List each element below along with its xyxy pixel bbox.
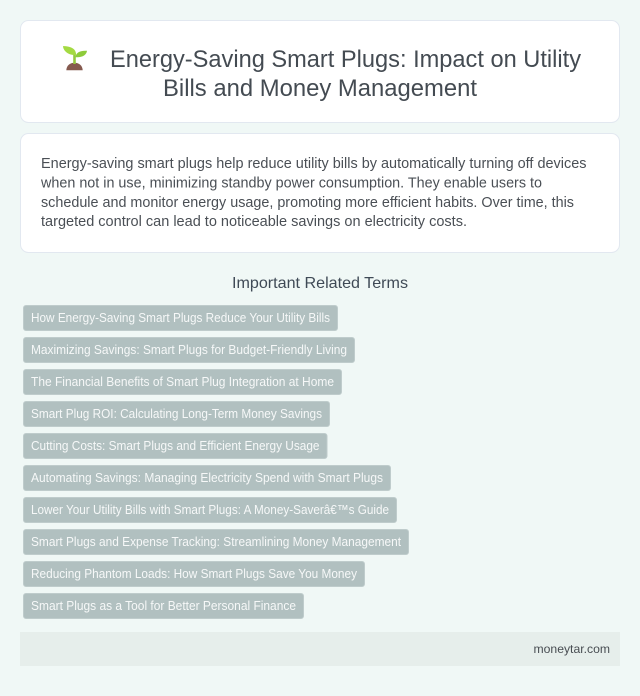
panel: summary card bbox=[20, 134, 620, 252]
title: Energy-Saving Smart Plugs: Impact on Utility bbox=[110, 46, 581, 73]
icon: sprout bbox=[63, 46, 87, 70]
tag 3: The Financial Benefits of Smart Plug Integration at Home bbox=[31, 374, 334, 389]
tag 6: Automating Savings: Managing Electricity Spend with Smart Plugs bbox=[31, 470, 383, 485]
tag 9: Reducing Phantom Loads: How Smart Plugs Save You Money bbox=[31, 566, 357, 581]
footer site name: moneytar.com bbox=[534, 642, 610, 656]
tag 8: Smart Plugs and Expense Tracking: Streamlining Money Management bbox=[31, 534, 401, 549]
tag 4 bbox=[24, 402, 330, 426]
tag 2: Maximizing Savings: Smart Plugs for Budget-Friendly Living bbox=[31, 342, 347, 357]
list of related term tags bbox=[24, 306, 408, 618]
tag 5: Cutting Costs: Smart Plugs and Efficient Energy Usage bbox=[31, 438, 320, 453]
tag 6 bbox=[24, 466, 390, 490]
summary text: Energy-saving smart plugs help reduce utility bills by automatically turning off devices bbox=[41, 155, 586, 172]
tag 4: Smart Plug ROI: Calculating Long-Term Money Savings bbox=[31, 406, 322, 421]
tag 3 bbox=[24, 370, 342, 394]
tag 10: Smart Plugs as a Tool for Better Personal Finance bbox=[31, 598, 296, 613]
tag 7 bbox=[24, 498, 396, 522]
title: Bills and Money Management bbox=[163, 75, 477, 102]
tag 7: Lower Your Utility Bills with Smart Plugs: A Money-Saverâ€™s Guide bbox=[31, 502, 389, 517]
footer bar bbox=[20, 632, 620, 666]
tag 1 bbox=[24, 306, 338, 330]
panel: title card bbox=[20, 20, 620, 122]
summary text bbox=[40, 155, 586, 230]
tag 8 bbox=[24, 530, 408, 554]
tag 10 bbox=[24, 594, 304, 618]
tag 5 bbox=[24, 434, 327, 458]
title bbox=[110, 46, 581, 102]
summary text: when not in use, minimizing standby power consumption. They enable users to bbox=[40, 174, 542, 192]
summary text: schedule and monitor energy usage, promoting more efficient habits. Over time, this bbox=[41, 194, 574, 211]
tag 2 bbox=[24, 338, 354, 362]
heading: important related terms: Important Related Terms bbox=[232, 275, 408, 292]
summary text: targeted control can lead to noticeable savings on electricity costs. bbox=[41, 213, 467, 230]
tag 1: How Energy-Saving Smart Plugs Reduce Your Utility Bills bbox=[31, 310, 330, 325]
tag 9 bbox=[24, 562, 364, 586]
